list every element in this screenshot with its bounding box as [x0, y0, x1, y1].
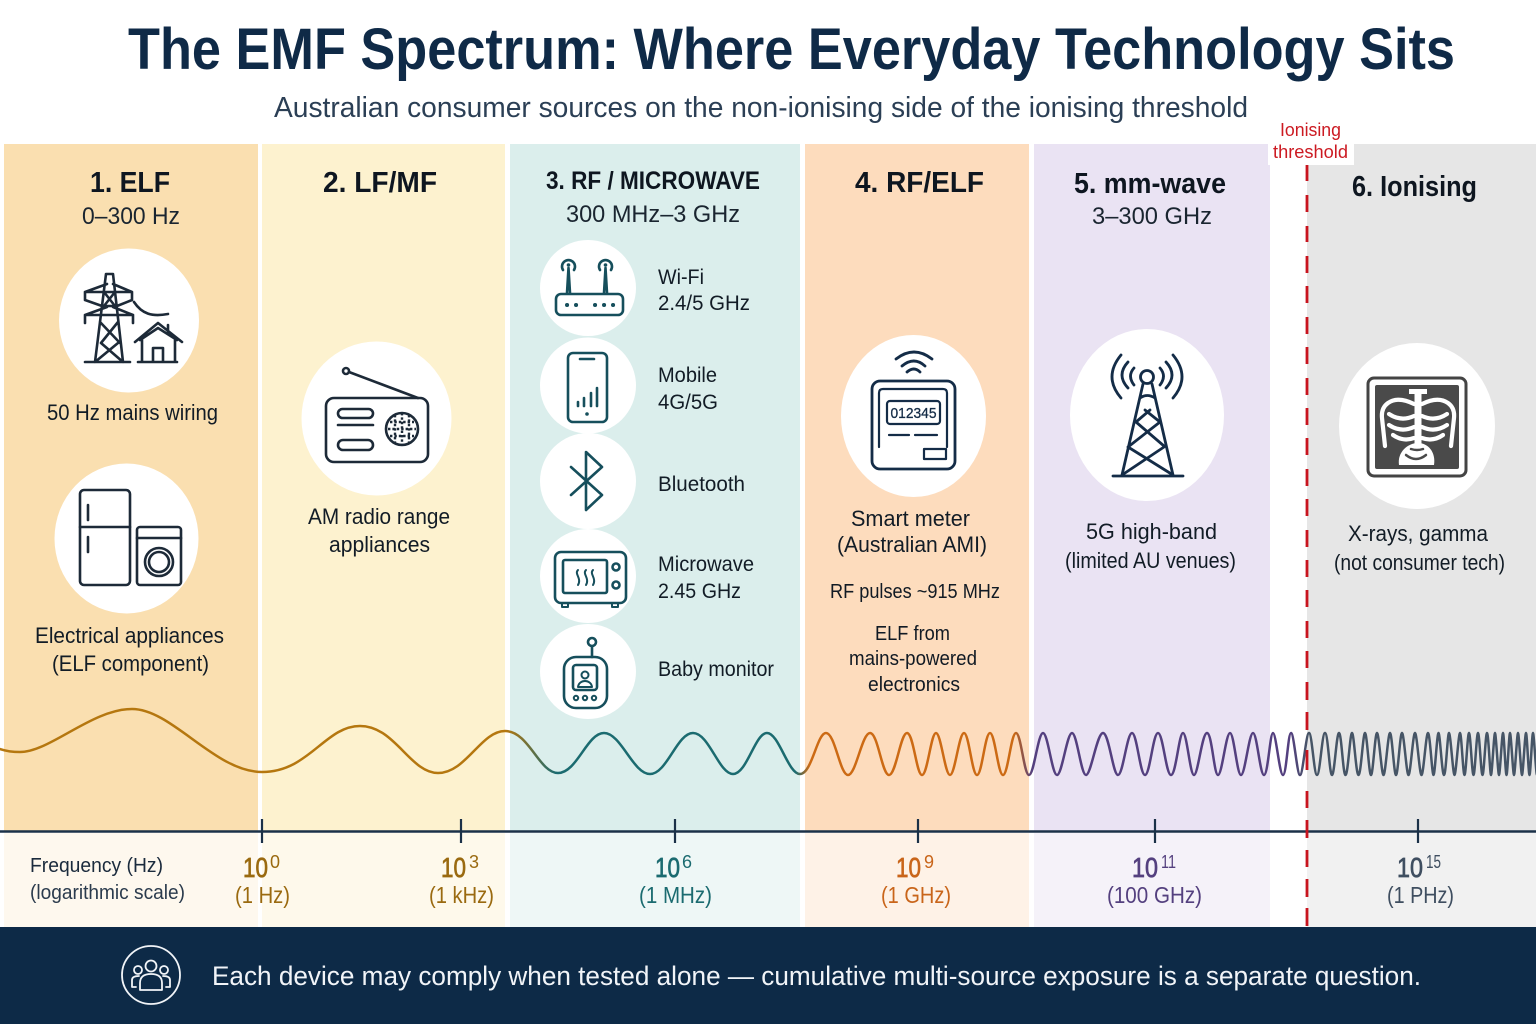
- icon: smart meter: [841, 335, 986, 497]
- tick label: 1 Hz: [235, 852, 290, 908]
- tick label: 1 MHz: (1 MHz): [639, 882, 712, 908]
- footer banner: [0, 927, 1536, 1024]
- footer message: Each device may comply when tested alone — cumulative multi-source exposure is a separate question.: [212, 961, 1421, 991]
- label: mobile: Mobile: [658, 364, 717, 387]
- label: ELF from electronics: electronics: [868, 674, 960, 696]
- axis title: Frequency (Hz): [30, 855, 163, 877]
- tick label: 1 PHz: (1 PHz): [1387, 882, 1454, 908]
- heading: RF / Microwave: 3. RF / MICROWAVE: [546, 167, 760, 195]
- tick label: 100 GHz: 11: [1161, 852, 1176, 872]
- icon: bluetooth: [540, 433, 636, 529]
- tick label: 1 kHz: (1 kHz): [429, 882, 494, 908]
- label: 5G high-band: [1065, 519, 1236, 573]
- label: wi-fi: [658, 266, 750, 315]
- label: AM radio: [308, 504, 450, 557]
- icon: x-ray: [1339, 343, 1495, 509]
- tick label: 100 GHz: [1107, 852, 1202, 908]
- label: microwave: Microwave: [658, 553, 754, 576]
- icon: radio: [302, 342, 452, 496]
- icon: fridge and washer: [54, 464, 198, 614]
- wave: increasing frequency: [0, 709, 1536, 775]
- icon: microwave oven: [540, 529, 636, 623]
- tick label: 1 kHz: 3: [469, 852, 479, 872]
- tick label: 1 Hz: (1 Hz): [235, 882, 290, 908]
- label: baby monitor: Baby monitor: [658, 658, 774, 681]
- tick label: 1 GHz: (1 GHz): [881, 882, 951, 908]
- tick label: 100 GHz: 10: [1132, 852, 1158, 883]
- frequency range: 3–300 GHz: [1092, 203, 1212, 230]
- icon: group of people: [122, 946, 180, 1004]
- label: wi-fi: Wi-Fi: [658, 266, 704, 289]
- panel: 4. RF/ELF: [805, 144, 1029, 927]
- tick label: 1 PHz: [1387, 852, 1454, 908]
- heading: mm-wave: 5. mm-wave: [1074, 168, 1226, 200]
- tick label: 1 MHz: 6: [682, 852, 692, 872]
- label: RF pulses: RF pulses ~915 MHz: [830, 581, 1000, 603]
- axis title: (logarithmic scale): [30, 882, 185, 904]
- label: smart meter: Smart meter: [851, 506, 970, 531]
- label: AM radio: AM radio range: [308, 504, 450, 529]
- panel: 3. RF / Microwave: [510, 144, 800, 927]
- label: ELF from electronics: ELF from: [875, 623, 950, 645]
- label: ELF from electronics: mains-powered: [849, 648, 977, 670]
- label: electrical appliances: Electrical appliances: [35, 623, 224, 648]
- label: mobile: [658, 364, 718, 414]
- panel: 5. mm-wave: [1034, 144, 1270, 927]
- label: electrical appliances: (ELF component): [52, 651, 209, 676]
- label: 5G high-band: 5G high-band: [1086, 519, 1217, 544]
- label: x-rays: (not consumer tech): [1334, 550, 1505, 575]
- panel: 6. Ionising: [1307, 144, 1536, 927]
- tick label: 1 kHz: [429, 852, 494, 908]
- tick label: 1 PHz: 15: [1426, 852, 1441, 872]
- label: smart meter: [837, 506, 987, 557]
- label: smart meter: (Australian AMI): [837, 532, 987, 557]
- label: microwave: 2.45 GHz: [658, 580, 741, 603]
- tick label: 1 MHz: 10: [655, 852, 680, 883]
- icon: mobile phone: [540, 338, 636, 434]
- subtitle: Australian consumer sources on the non-ionising side of the ionising threshold: [274, 92, 1248, 124]
- tick label: 1 kHz: 10: [441, 852, 466, 883]
- heading: Ionising: 6. Ionising: [1352, 171, 1477, 203]
- heading: LF/MF: 2. LF/MF: [323, 167, 437, 199]
- label: microwave: [658, 553, 754, 603]
- panel: 2. LF/MF: [262, 144, 505, 927]
- ionising threshold marker: Ionising: [1280, 120, 1341, 140]
- tick label: 1 MHz: [639, 852, 712, 908]
- frequency axis: [0, 819, 1536, 843]
- icon: wi-fi router: [540, 240, 636, 336]
- axis title: [30, 855, 185, 904]
- tick label: 1 Hz: 0: [270, 852, 280, 872]
- frequency range: 300 MHz–3 GHz: [566, 201, 740, 228]
- label: mains wiring: 50 Hz mains wiring: [47, 400, 218, 425]
- tick label: 1 PHz: 10: [1397, 852, 1423, 883]
- label: 5G high-band: (limited AU venues): [1065, 548, 1236, 573]
- tick label: 1 GHz: 9: [924, 852, 934, 872]
- label: bluetooth: Bluetooth: [658, 473, 745, 496]
- label: mobile: 4G/5G: [658, 391, 718, 414]
- icon: baby monitor: [540, 624, 636, 719]
- icon: pylon and house: [59, 248, 199, 392]
- panel: 1. ELF: [4, 144, 258, 927]
- label: wi-fi: 2.4/5 GHz: [658, 292, 750, 315]
- icon: 5G mast: [1070, 329, 1224, 501]
- label: electrical appliances: [35, 623, 224, 676]
- frequency range: 0–300 Hz: [82, 203, 180, 230]
- ionising threshold marker: threshold: [1273, 142, 1348, 162]
- heading: ELF: 1. ELF: [90, 167, 170, 199]
- tick label: 1 Hz: 10: [243, 852, 268, 883]
- heading: RF/ELF: 4. RF/ELF: [855, 167, 984, 199]
- label: x-rays: X-rays, gamma: [1348, 521, 1489, 546]
- tick label: 1 GHz: 10: [896, 852, 921, 883]
- ionising threshold marker: [1268, 120, 1354, 926]
- tick label: 100 GHz: (100 GHz): [1107, 882, 1202, 908]
- tick label: 1 GHz: [881, 852, 951, 908]
- label: ELF from electronics: [849, 623, 977, 696]
- label: x-rays: [1334, 521, 1505, 575]
- label: AM radio: appliances: [329, 532, 430, 557]
- icon: smart meter: 012345: [890, 405, 936, 422]
